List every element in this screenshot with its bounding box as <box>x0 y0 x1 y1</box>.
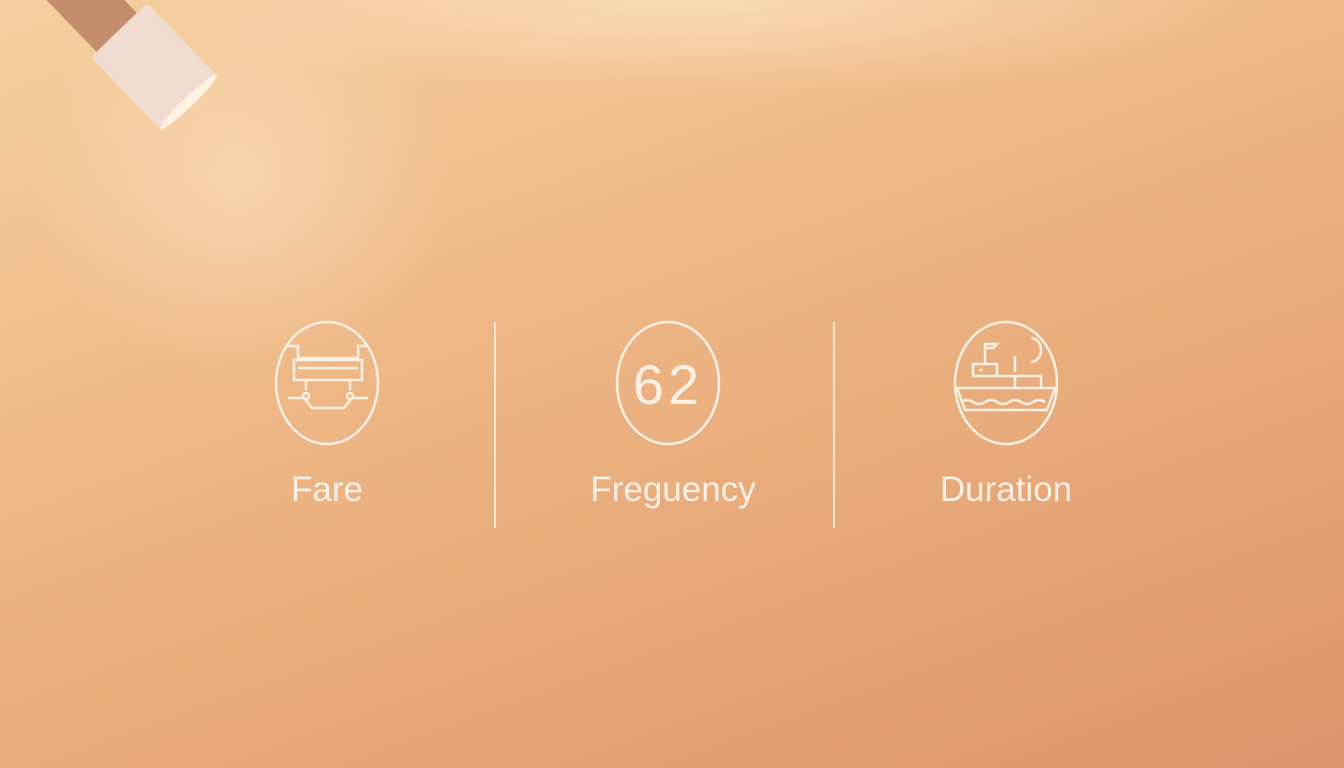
icon: frequency 62: 62 <box>633 353 703 416</box>
icon: frequency 62 <box>616 320 720 446</box>
icon: fare <box>274 320 380 446</box>
label: fare: Fare <box>291 470 363 509</box>
icon: duration ship <box>954 320 1058 446</box>
icon: spotlight lamp <box>46 0 216 130</box>
label: duration: Duration <box>940 470 1072 509</box>
label: frequency: Freguency <box>590 470 756 509</box>
